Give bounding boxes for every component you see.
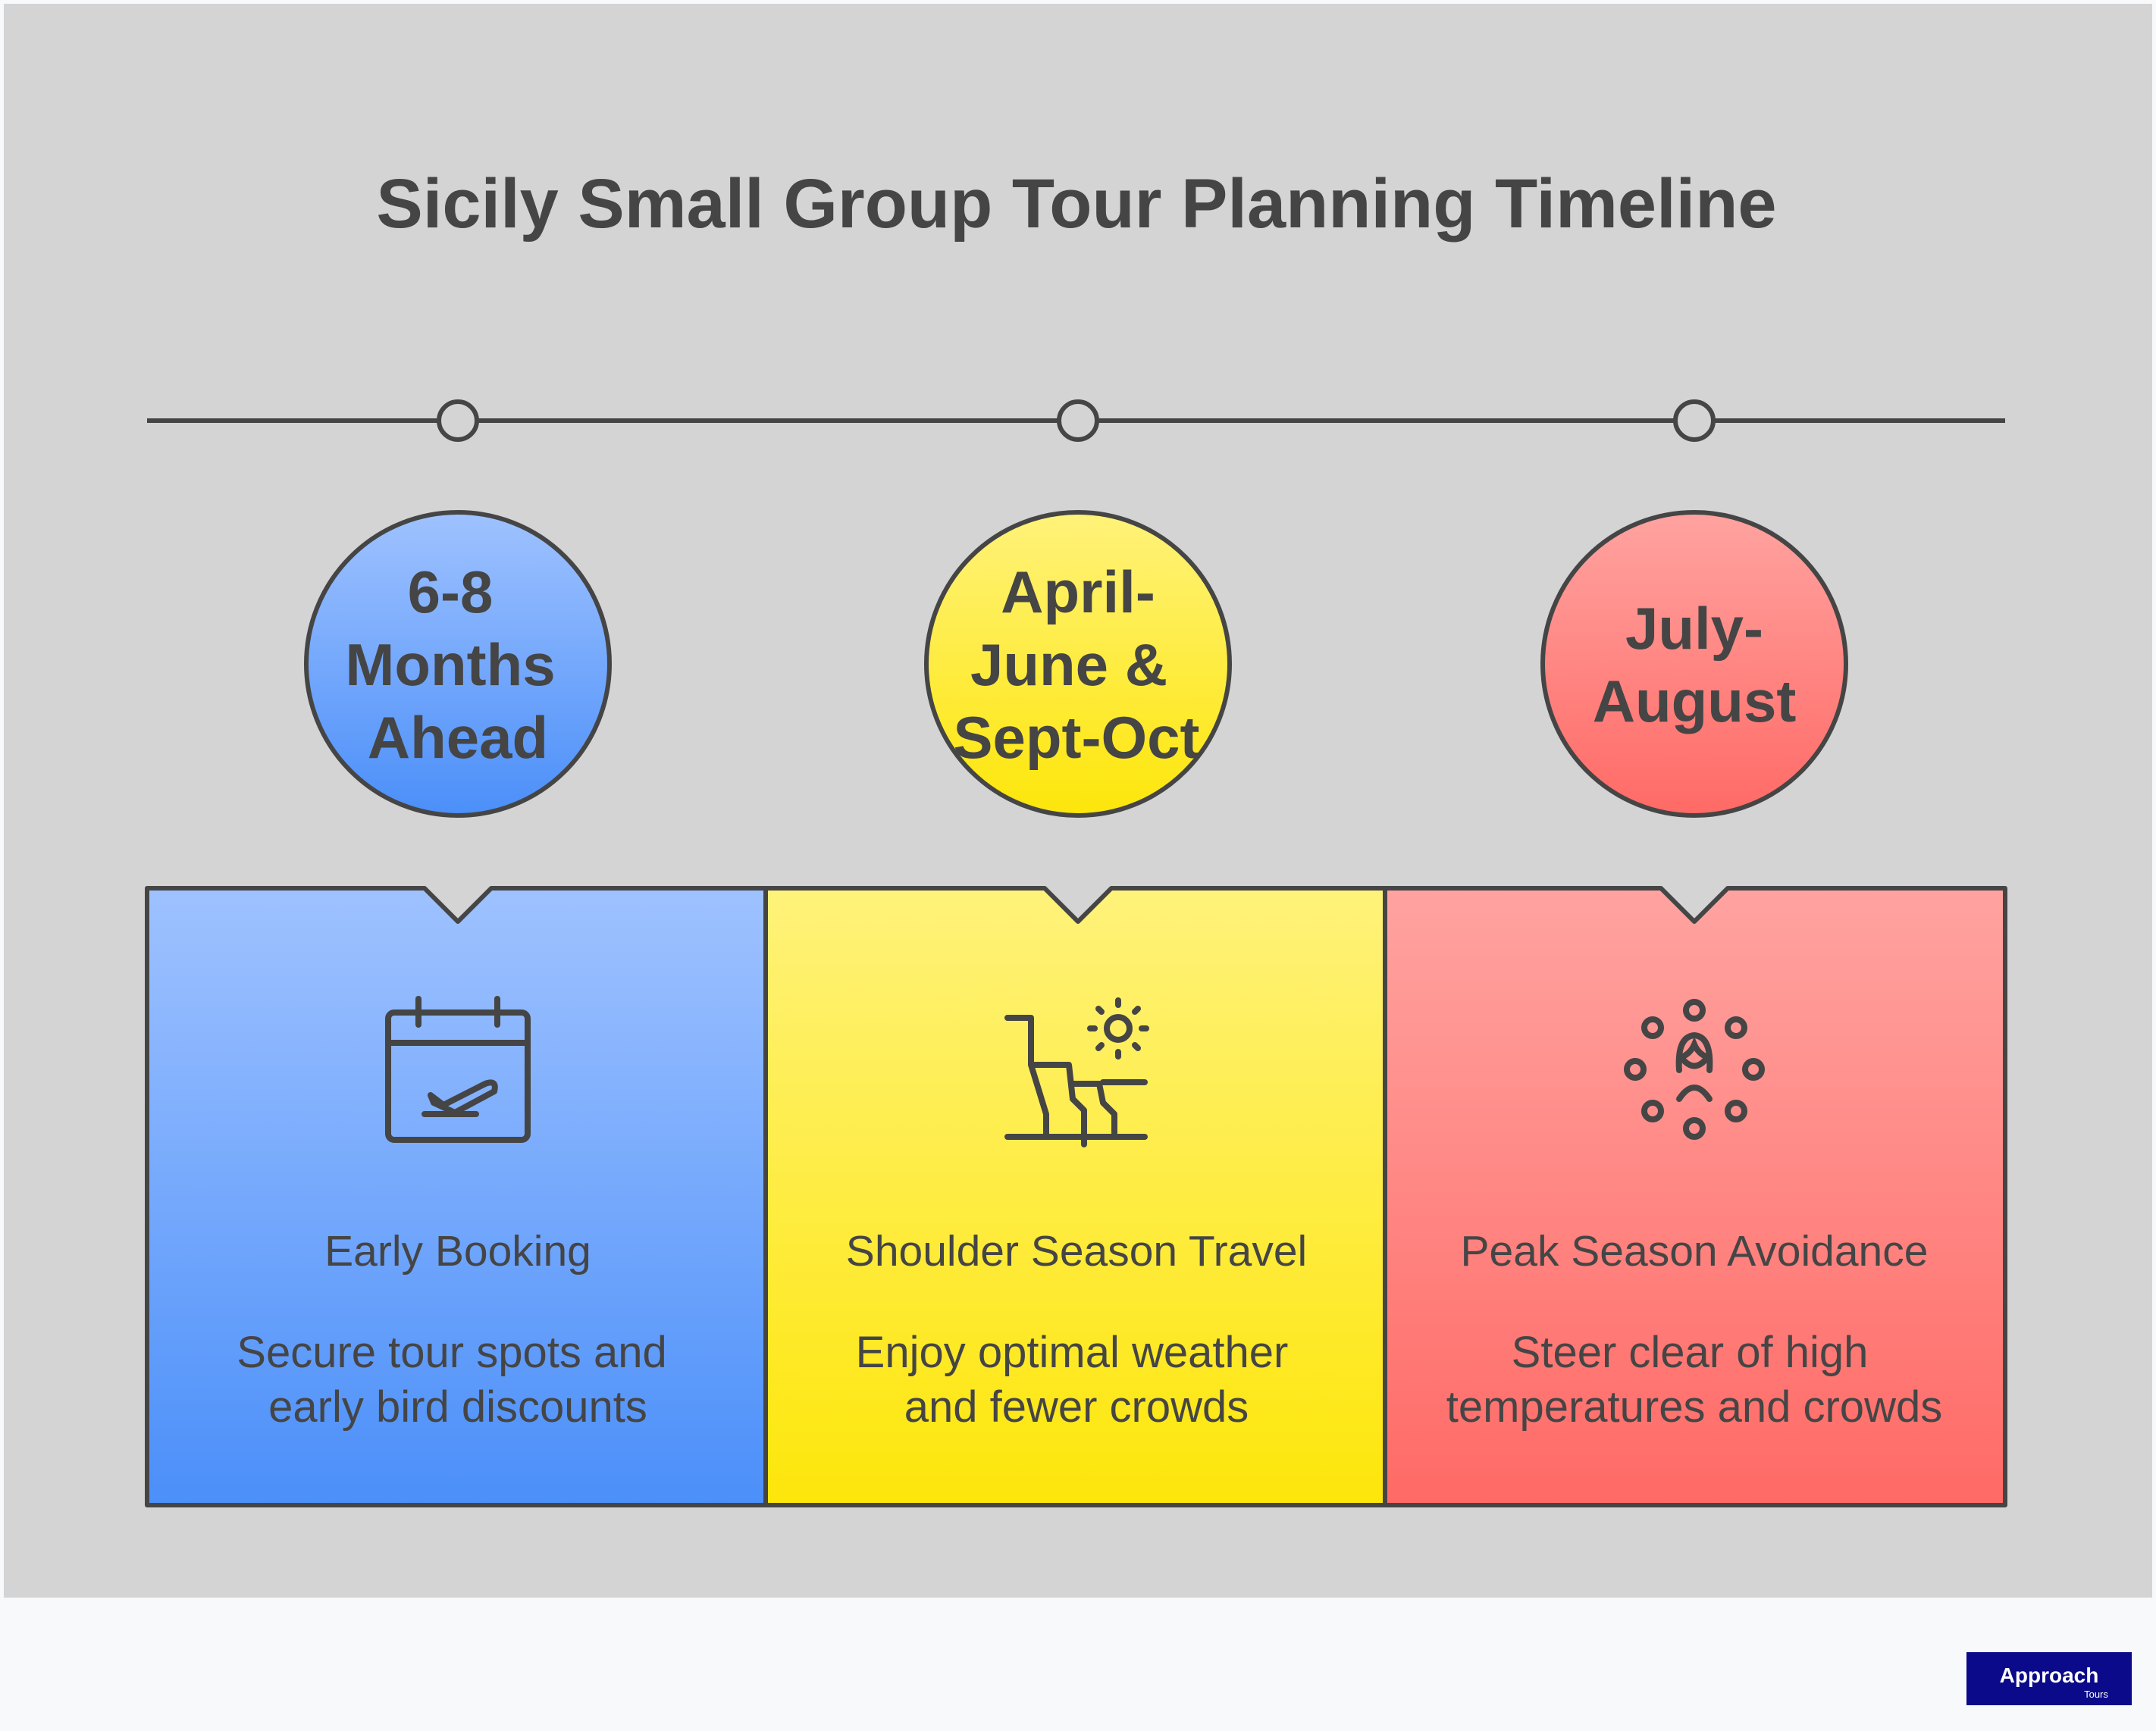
panel: Shoulder Season Travel — [766, 888, 1385, 1505]
panel: Shoulder Season Travel: Shoulder Season Travel — [846, 1227, 1307, 1276]
circle: April-June & Sept-Oct: Sept-Oct — [953, 704, 1200, 771]
panel: Shoulder Season Travel: Enjoy optimal weather — [856, 1328, 1288, 1377]
panel: Early Booking: Early Booking — [324, 1227, 591, 1276]
circle: July-August — [1543, 512, 1846, 815]
circle: 6-8 Months Ahead: Months — [345, 631, 556, 698]
title: Sicily Small Group Tour Planning Timeline — [376, 165, 1777, 243]
panel: Early Booking: early bird discounts — [268, 1382, 647, 1432]
circle: April-June & Sept-Oct — [926, 512, 1230, 815]
panel: Early Booking: Secure tour spots and — [237, 1328, 667, 1377]
panel: Early Booking — [147, 888, 766, 1505]
circle: 6-8 Months Ahead: Ahead — [368, 704, 548, 771]
circle: July-August: July- — [1625, 595, 1763, 662]
logo: Approach Tours: Tours — [2084, 1689, 2108, 1700]
logo: Approach Tours: Approach — [2000, 1664, 2098, 1687]
panel: Peak Season Avoidance: Peak Season Avoidance — [1461, 1227, 1928, 1276]
circle: 6-8 Months Ahead — [306, 512, 610, 815]
icon: person surrounded by crowd — [1627, 1002, 1762, 1137]
logo: Approach Tours — [1966, 1652, 2132, 1705]
panel: Peak Season Avoidance — [1385, 888, 2005, 1505]
icon: cliff with sun — [1007, 1000, 1146, 1144]
timeline line — [147, 402, 2005, 440]
circle: April-June & Sept-Oct: June & — [970, 631, 1167, 698]
circle: July-August: August — [1593, 668, 1796, 734]
circle: April-June & Sept-Oct: April- — [1001, 559, 1155, 625]
circle: 6-8 Months Ahead: 6-8 — [408, 559, 493, 625]
icon: calendar with plane — [388, 999, 528, 1140]
panel: Peak Season Avoidance: Steer clear of high — [1512, 1328, 1868, 1377]
panel: Shoulder Season Travel: and fewer crowds — [904, 1382, 1249, 1432]
panel: Peak Season Avoidance: temperatures and crowds — [1446, 1382, 1942, 1432]
